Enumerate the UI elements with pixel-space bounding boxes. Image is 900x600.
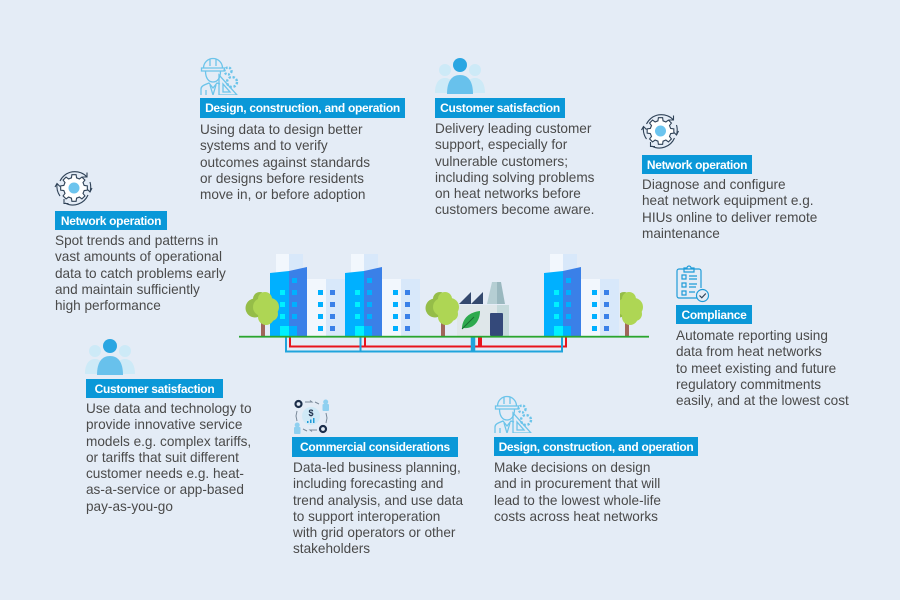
text block: as-a-service or app-based — [86, 482, 244, 497]
panel: design, construction and operation (bottom) — [494, 396, 698, 524]
text block: Delivery leading customer — [435, 121, 591, 136]
heading: Design, construction, and operation — [205, 101, 400, 115]
heading — [642, 155, 752, 174]
text block: customer needs e.g. heat- — [86, 466, 244, 481]
text block: or designs before residents — [200, 171, 364, 186]
text block — [676, 328, 849, 408]
heading — [292, 437, 458, 457]
text block: including solving problems — [435, 170, 594, 185]
text block: provide innovative service — [86, 417, 242, 432]
text block: regulatory commitments — [676, 377, 821, 392]
text block: including forecasting and — [293, 476, 443, 491]
text block: costs across heat networks — [494, 509, 658, 524]
text block: pay-as-you-go — [86, 499, 173, 514]
text block: Use data and technology to — [86, 401, 252, 416]
text block: outcomes against standards — [200, 155, 370, 170]
heading — [86, 379, 223, 398]
icon: gear with cycle arrows — [641, 114, 679, 149]
text block: lead to the lowest whole-life — [494, 493, 661, 508]
heading: Customer satisfaction — [95, 382, 214, 396]
text block: data from heat networks — [676, 344, 822, 359]
text block — [494, 460, 661, 524]
panel: customer satisfaction (top) — [435, 58, 594, 217]
heading — [200, 98, 405, 118]
text block: to meet existing and future — [676, 361, 836, 376]
icon: people — [435, 58, 485, 94]
text block: vast amounts of operational — [55, 249, 222, 264]
text block — [642, 177, 817, 241]
text block — [86, 401, 252, 514]
heading: Design, construction, and operation — [499, 440, 693, 454]
tree — [426, 292, 459, 336]
heading — [676, 305, 752, 324]
text block: to support interoperation — [293, 509, 440, 524]
icon: engineer — [200, 58, 238, 95]
heading: Compliance — [681, 308, 747, 322]
text block: support, especially for — [435, 137, 567, 152]
panel: design, construction and operation (top) — [200, 58, 405, 202]
text block: Diagnose and configure — [642, 177, 786, 192]
ground line — [239, 336, 649, 338]
heading: Customer satisfaction — [440, 101, 560, 115]
text block: HIUs online to deliver remote — [642, 210, 817, 225]
text block: or tariffs that suit different — [86, 450, 239, 465]
text block — [200, 122, 370, 202]
tree — [620, 292, 643, 336]
building group 2 — [345, 254, 420, 336]
panel: commercial considerations — [292, 400, 464, 556]
central illustration: heat network connecting buildings — [239, 254, 649, 352]
text block: Data-led business planning, — [293, 460, 461, 475]
text block: Spot trends and patterns in — [55, 233, 218, 248]
text block: systems and to verify — [200, 138, 328, 153]
heading: Network operation — [61, 214, 161, 228]
heating pipes: flow and return — [286, 337, 566, 352]
icon: gear with cycle arrows — [54, 171, 92, 206]
text block: Make decisions on design — [494, 460, 650, 475]
panel: network operation (right) — [641, 114, 817, 241]
text block — [55, 233, 226, 313]
text block — [293, 460, 464, 556]
building group 1 — [270, 254, 345, 336]
text block: and maintain sufficiently — [55, 282, 200, 297]
text block: trend analysis, and use data — [293, 493, 463, 508]
text block: Automate reporting using — [676, 328, 828, 343]
text block: high performance — [55, 298, 161, 313]
text block: maintenance — [642, 226, 720, 241]
text block: vulnerable customers; — [435, 154, 568, 169]
icon: finance cycle: $ — [308, 408, 314, 418]
text block: Using data to design better — [200, 122, 362, 137]
panel: compliance — [676, 265, 849, 408]
low carbon energy centre — [457, 282, 509, 336]
text block: customers become aware. — [435, 202, 594, 217]
text block — [435, 121, 594, 217]
text block: data to catch problems early — [55, 266, 226, 281]
text block: with grid operators or other — [293, 525, 455, 540]
icon: people — [85, 339, 135, 375]
text block: easily, and at the lowest cost — [676, 393, 849, 408]
text block: models e.g. complex tariffs, — [86, 434, 251, 449]
panel: customer satisfaction (left) — [85, 339, 252, 514]
icon: engineer — [494, 396, 532, 433]
text block: on heat networks before — [435, 186, 581, 201]
text block: move in, or before adoption — [200, 187, 366, 202]
heading: Commercial considerations — [300, 440, 450, 454]
building group 3 — [544, 254, 619, 336]
icon: clipboard checklist — [676, 265, 710, 302]
panel: network operation (left) — [54, 171, 226, 313]
heading: Network operation — [647, 158, 747, 172]
heading — [435, 98, 565, 118]
heading — [55, 211, 167, 230]
text block: and in procurement that will — [494, 476, 660, 491]
tree — [246, 292, 279, 336]
icon: finance cycle — [294, 400, 329, 434]
text block: stakeholders — [293, 541, 370, 556]
text block: heat network equipment e.g. — [642, 193, 814, 208]
